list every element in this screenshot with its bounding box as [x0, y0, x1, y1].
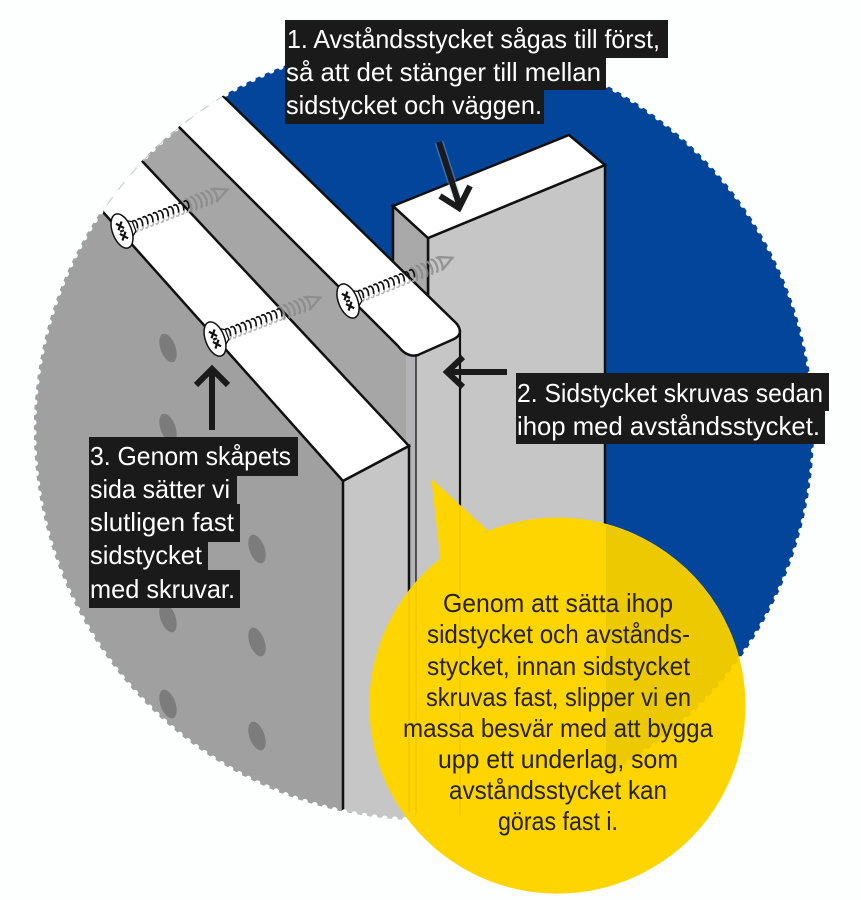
speech bubble text: sidstycket och avstånds- [427, 619, 690, 649]
callout 1: 1. Avståndsstycket sågas till först, [287, 24, 660, 54]
callout 2: 2. Sidstycket skruvas sedan [517, 378, 823, 408]
darker tint where blue wall lies under the bubble [606, 524, 738, 775]
screw 2 [200, 282, 327, 359]
cabinet gray face [34, 214, 342, 812]
side piece narrow face [406, 355, 416, 589]
screw 1 [107, 174, 234, 251]
callout 2 [516, 373, 829, 444]
white strip: side piece top [178, 96, 459, 354]
faint edges showing through the bubble [409, 500, 460, 815]
gray band: cabinet-side gap [142, 127, 406, 441]
blue wall background [34, 66, 814, 820]
callout 3: 3. Genom skåpets [90, 441, 291, 471]
callout 1 [285, 20, 668, 124]
cabinet side face with holes [34, 214, 342, 812]
callout 3: sida sätter vi [90, 474, 230, 504]
faint dashed edge over white strips [107, 97, 222, 205]
speech bubble text: skruvas fast, slipper vi en [426, 682, 691, 712]
speech bubble text: göras fast i. [498, 806, 618, 836]
arrow 1: down to spacer [439, 142, 470, 208]
cabinet front edge face [343, 446, 409, 840]
white outer area behind strips [102, 138, 166, 210]
speech bubble text: avståndsstycket kan [449, 775, 667, 805]
screw 3 [332, 242, 460, 321]
spacer side face [393, 206, 428, 300]
side piece: sidstycke faces [406, 330, 462, 589]
callout 3 [89, 437, 298, 608]
spacer front face [429, 163, 606, 531]
speech bubble text: upp ett underlag, som [438, 744, 678, 774]
yellow speech bubble [369, 480, 746, 894]
arrow 2: left to side piece [447, 357, 507, 387]
callout 2: ihop med avståndsstycket. [517, 411, 820, 441]
illustration: circular detail view [34, 66, 814, 820]
spacer block: avståndsstycke [390, 134, 608, 531]
callout 1: så att det stänger till mellan [286, 57, 601, 87]
side piece wide face [416, 351, 430, 581]
spacer top face [393, 135, 605, 238]
callout 3: slutligen fast [90, 507, 235, 537]
speech bubble text [403, 588, 713, 836]
callout 3: sidstycket [90, 540, 203, 570]
speech bubble text: massa besvär med att bygga [403, 713, 713, 743]
arrow 3: up to screw [196, 369, 228, 430]
callout 3: med skruvar. [90, 574, 235, 604]
callout 1: sidstycket och väggen. [286, 90, 542, 120]
speech bubble text: stycket, innan sidstycket [427, 651, 691, 681]
screw holes [156, 331, 269, 753]
speech bubble text: Genom att sätta ihop [443, 588, 673, 618]
white strip: cabinet edge top [102, 163, 407, 480]
scalloped circle edge [34, 40, 814, 820]
